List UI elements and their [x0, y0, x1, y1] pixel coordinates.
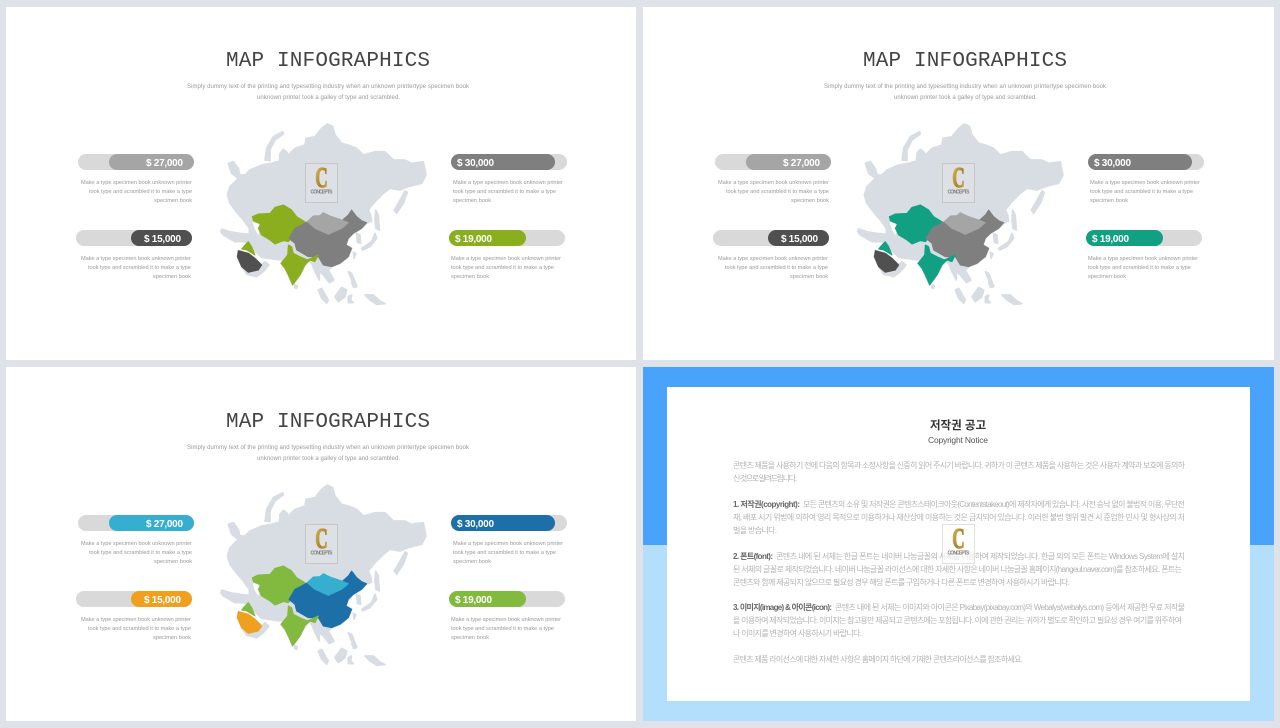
description: specimen book [451, 274, 489, 280]
logo [942, 163, 974, 202]
paragraph 2: font: 콘텐츠와 함께 제공되지 않으므로 필요성 경우 해당 폰트를 구입하거나 다른 폰트로 변경하여 사용하시기 바랍니다. [733, 577, 1070, 587]
description [451, 617, 561, 641]
description: took type and scrambled it to make a type [726, 189, 829, 195]
description: took type and scrambled it to make a type [1090, 189, 1193, 195]
logo: CONCEPTS [948, 190, 970, 196]
intro paragraph: 콘텐츠 제품을 사용하기 전에 다음의 항목과 소정사항을 신중히 읽어 주시기 바랍니다. 귀하가 이 콘텐츠 제품을 사용하는 것은 사용자 계약과 보호에 동의하 [733, 460, 1186, 470]
description [718, 256, 828, 280]
subtitle text: Simply dummy text of the printing and typesetting industry when an unknown printertype specimen book [187, 445, 470, 451]
description: Make a type specimen book unknown printer [453, 541, 563, 547]
paragraph 2: font: 된 서체의 글꼴로 제작되었습니다. 네이버 나눔글꼴 라이선스에 대한 자세한 사항은 네이버 나눔글꼴 홈페이지(hangeul.naver.com)를 참조하세요. 폰트는 [733, 564, 1182, 574]
description: specimen book [153, 274, 191, 280]
pill: $ 30,000: $ 30,000 [1094, 158, 1131, 169]
subtitle text: unknown printer took a galley of type and scrambled. [257, 95, 400, 101]
subtitle text: unknown printer took a galley of type and scrambled. [257, 456, 400, 462]
pill: $ 19,000 [449, 591, 565, 607]
pill: $ 30,000: $ 30,000 [457, 158, 494, 169]
pill: $ 19,000 [449, 230, 565, 246]
logo [306, 163, 338, 202]
pill: $ 15,000 [713, 230, 829, 246]
paragraph 3: image and icon: 을 이용하여 제작되었습니다. 이미지는 참고용만 제공되고 콘텐츠에는 포함됩니다. 이에 관한 권리는 귀하가 별도로 확인하고 필요성 경우 여기를 위주하여 [733, 615, 1182, 625]
description: Make a type specimen book unknown printer [451, 617, 561, 623]
pill: $ 27,000 [715, 154, 831, 170]
paragraph 1: copyright: 1. 저작권(copyright): [733, 499, 800, 509]
paragraph 1: copyright [733, 499, 1185, 535]
description: Make a type specimen book unknown printer [81, 541, 192, 547]
pill: $ 15,000 [76, 591, 192, 607]
description: took type and scrambled it to make a type [89, 189, 192, 195]
paragraph 3: image and icon: 3. 이미지(image) & 아이콘(icon): [733, 602, 832, 612]
logo: CONCEPTS [310, 550, 333, 556]
pill: $ 15,000: $ 15,000 [781, 234, 818, 245]
description: specimen book [453, 559, 491, 565]
description: took type and scrambled it to make a type [88, 265, 191, 271]
paragraph 3: image and icon: 나 이미지를 변경하여 사용하시기 바랍니다. [733, 628, 862, 638]
description: Make a type specimen book unknown printer [718, 256, 828, 262]
subtitle text [824, 84, 1107, 101]
description [451, 256, 561, 280]
pill: $ 19,000: $ 19,000 [1092, 234, 1129, 245]
description: took type and scrambled it to make a type [453, 550, 556, 556]
pill: $ 27,000: $ 27,000 [783, 158, 820, 169]
pill: $ 30,000 [451, 515, 567, 531]
map: Asia with teal highlights [858, 124, 1063, 304]
paragraph 2: font: 2. 폰트(font): [733, 552, 773, 561]
pill: $ 15,000 [76, 230, 192, 246]
description [81, 617, 191, 641]
description: specimen book [154, 559, 192, 565]
paragraph 3: image and icon [733, 602, 1185, 638]
description: took type and scrambled it to make a type [89, 550, 192, 556]
description: Make a type specimen book unknown printer [81, 617, 191, 623]
description: Make a type specimen book unknown printer [1088, 256, 1198, 262]
license note: 콘텐츠 제품 라이선스에 대한 자세한 사항은 홈페이지 하단에 기재한 콘텐츠라이선스를 참조하세요. [733, 654, 1023, 664]
description: took type and scrambled it to make a type [1088, 265, 1191, 271]
description [81, 180, 192, 204]
title: MAP INFOGRAPHICS [226, 50, 430, 73]
description: took type and scrambled it to make a type [451, 626, 554, 632]
pill: $ 19,000: $ 19,000 [455, 595, 492, 606]
panel: teal map slide [643, 7, 1274, 360]
description: Make a type specimen book unknown printer [453, 180, 563, 186]
subtitle text: unknown printer took a galley of type and scrambled. [894, 95, 1037, 101]
logo [942, 524, 974, 564]
subtitle text: Simply dummy text of the printing and typesetting industry when an unknown printertype specimen book [187, 84, 470, 90]
panel: copyright notice [643, 367, 1274, 721]
pill: $ 27,000 [78, 154, 194, 170]
copyright subheading: Copyright Notice [928, 435, 988, 445]
description [1088, 256, 1198, 280]
pill: $ 15,000: $ 15,000 [144, 234, 181, 245]
logo: C [952, 163, 965, 194]
pill: $ 19,000 [1086, 230, 1202, 246]
subtitle text [187, 445, 470, 462]
logo: CONCEPTS [310, 190, 333, 196]
description: specimen book [453, 198, 491, 204]
description: took type and scrambled it to make a type [725, 265, 828, 271]
description: specimen book [1090, 198, 1128, 204]
pill: $ 30,000: $ 30,000 [457, 519, 494, 530]
copyright heading: 저작권 공고 [930, 418, 986, 432]
paragraph 1: copyright: 모든 콘텐츠의 소유 및 저작권은 콘텐츠스테이크아웃(Contentstakeout)에 제작자에게 있습니다. 사전 승낙 없이 불법적 이용, 무단전 [803, 499, 1185, 509]
title: MAP INFOGRAPHICS [226, 411, 430, 434]
map: Asia with green highlights [221, 124, 426, 304]
description: Make a type specimen book unknown printer [81, 180, 192, 186]
panel: green map slide [6, 7, 636, 360]
description [453, 180, 563, 204]
description [81, 256, 191, 280]
intro paragraph: 신 것으로 알려드립니다. [733, 473, 797, 483]
description: took type and scrambled it to make a type [453, 189, 556, 195]
paragraph 1: copyright: 벌을 받습니다. [733, 525, 777, 535]
paragraph 2: font: 콘텐츠 내에 된 서체는 한글 폰트는 네이버 나눔글꼴의 서체를 이용하여 제작되었습니다. 한글 외의 모든 폰트는 Windows System에 설치 [776, 551, 1185, 561]
pill: $ 27,000: $ 27,000 [146, 519, 183, 530]
description: specimen book [791, 198, 829, 204]
logo: C [315, 163, 328, 194]
logo: C [952, 524, 965, 555]
description: Make a type specimen book unknown printer [1090, 180, 1200, 186]
description: took type and scrambled it to make a type [88, 626, 191, 632]
pill: $ 30,000 [1088, 154, 1204, 170]
description [81, 541, 192, 565]
pill: $ 27,000: $ 27,000 [146, 158, 183, 169]
pill: $ 27,000 [78, 515, 194, 531]
description: Make a type specimen book unknown printer [451, 256, 561, 262]
description: specimen book [153, 635, 191, 641]
pill: $ 19,000: $ 19,000 [455, 234, 492, 245]
title: MAP INFOGRAPHICS [863, 50, 1067, 73]
description: specimen book [1088, 274, 1126, 280]
subtitle text: Simply dummy text of the printing and typesetting industry when an unknown printertype specimen book [824, 84, 1107, 90]
logo: CONCEPTS [948, 550, 970, 556]
description [453, 541, 563, 565]
paragraph 1: copyright: 재, 배포 시기 위법에 의하여 영리 목적으로 이용하거나 재산상에 이용하는 것은 금지되어 있습니다. 이러한 불법 행위 발견 시 준엄한 민사 및 형사상의 처 [733, 512, 1185, 522]
description: specimen book [451, 635, 489, 641]
pill: $ 15,000: $ 15,000 [144, 595, 181, 606]
paragraph 3: image and icon: 콘텐츠 내에 된 서체는 이미지와 아이콘은 Pixabay(pixabay.com)와 Webalys(webalys.com) 등에서 제공한 무료 저작물 [835, 602, 1185, 612]
map: Asia with multicolor highlights [221, 485, 426, 665]
logo [306, 524, 338, 564]
intro paragraph [733, 460, 1186, 483]
description: specimen book [154, 198, 192, 204]
description [718, 180, 829, 204]
description: took type and scrambled it to make a type [451, 265, 554, 271]
panel: blue and orange map slide [6, 367, 636, 721]
description: specimen book [790, 274, 828, 280]
description: Make a type specimen book unknown printer [81, 256, 191, 262]
pill: $ 30,000 [451, 154, 567, 170]
paragraph 2: font [733, 551, 1185, 587]
description [1090, 180, 1200, 204]
subtitle text [187, 84, 470, 101]
description: Make a type specimen book unknown printer [718, 180, 829, 186]
logo: C [315, 524, 328, 555]
